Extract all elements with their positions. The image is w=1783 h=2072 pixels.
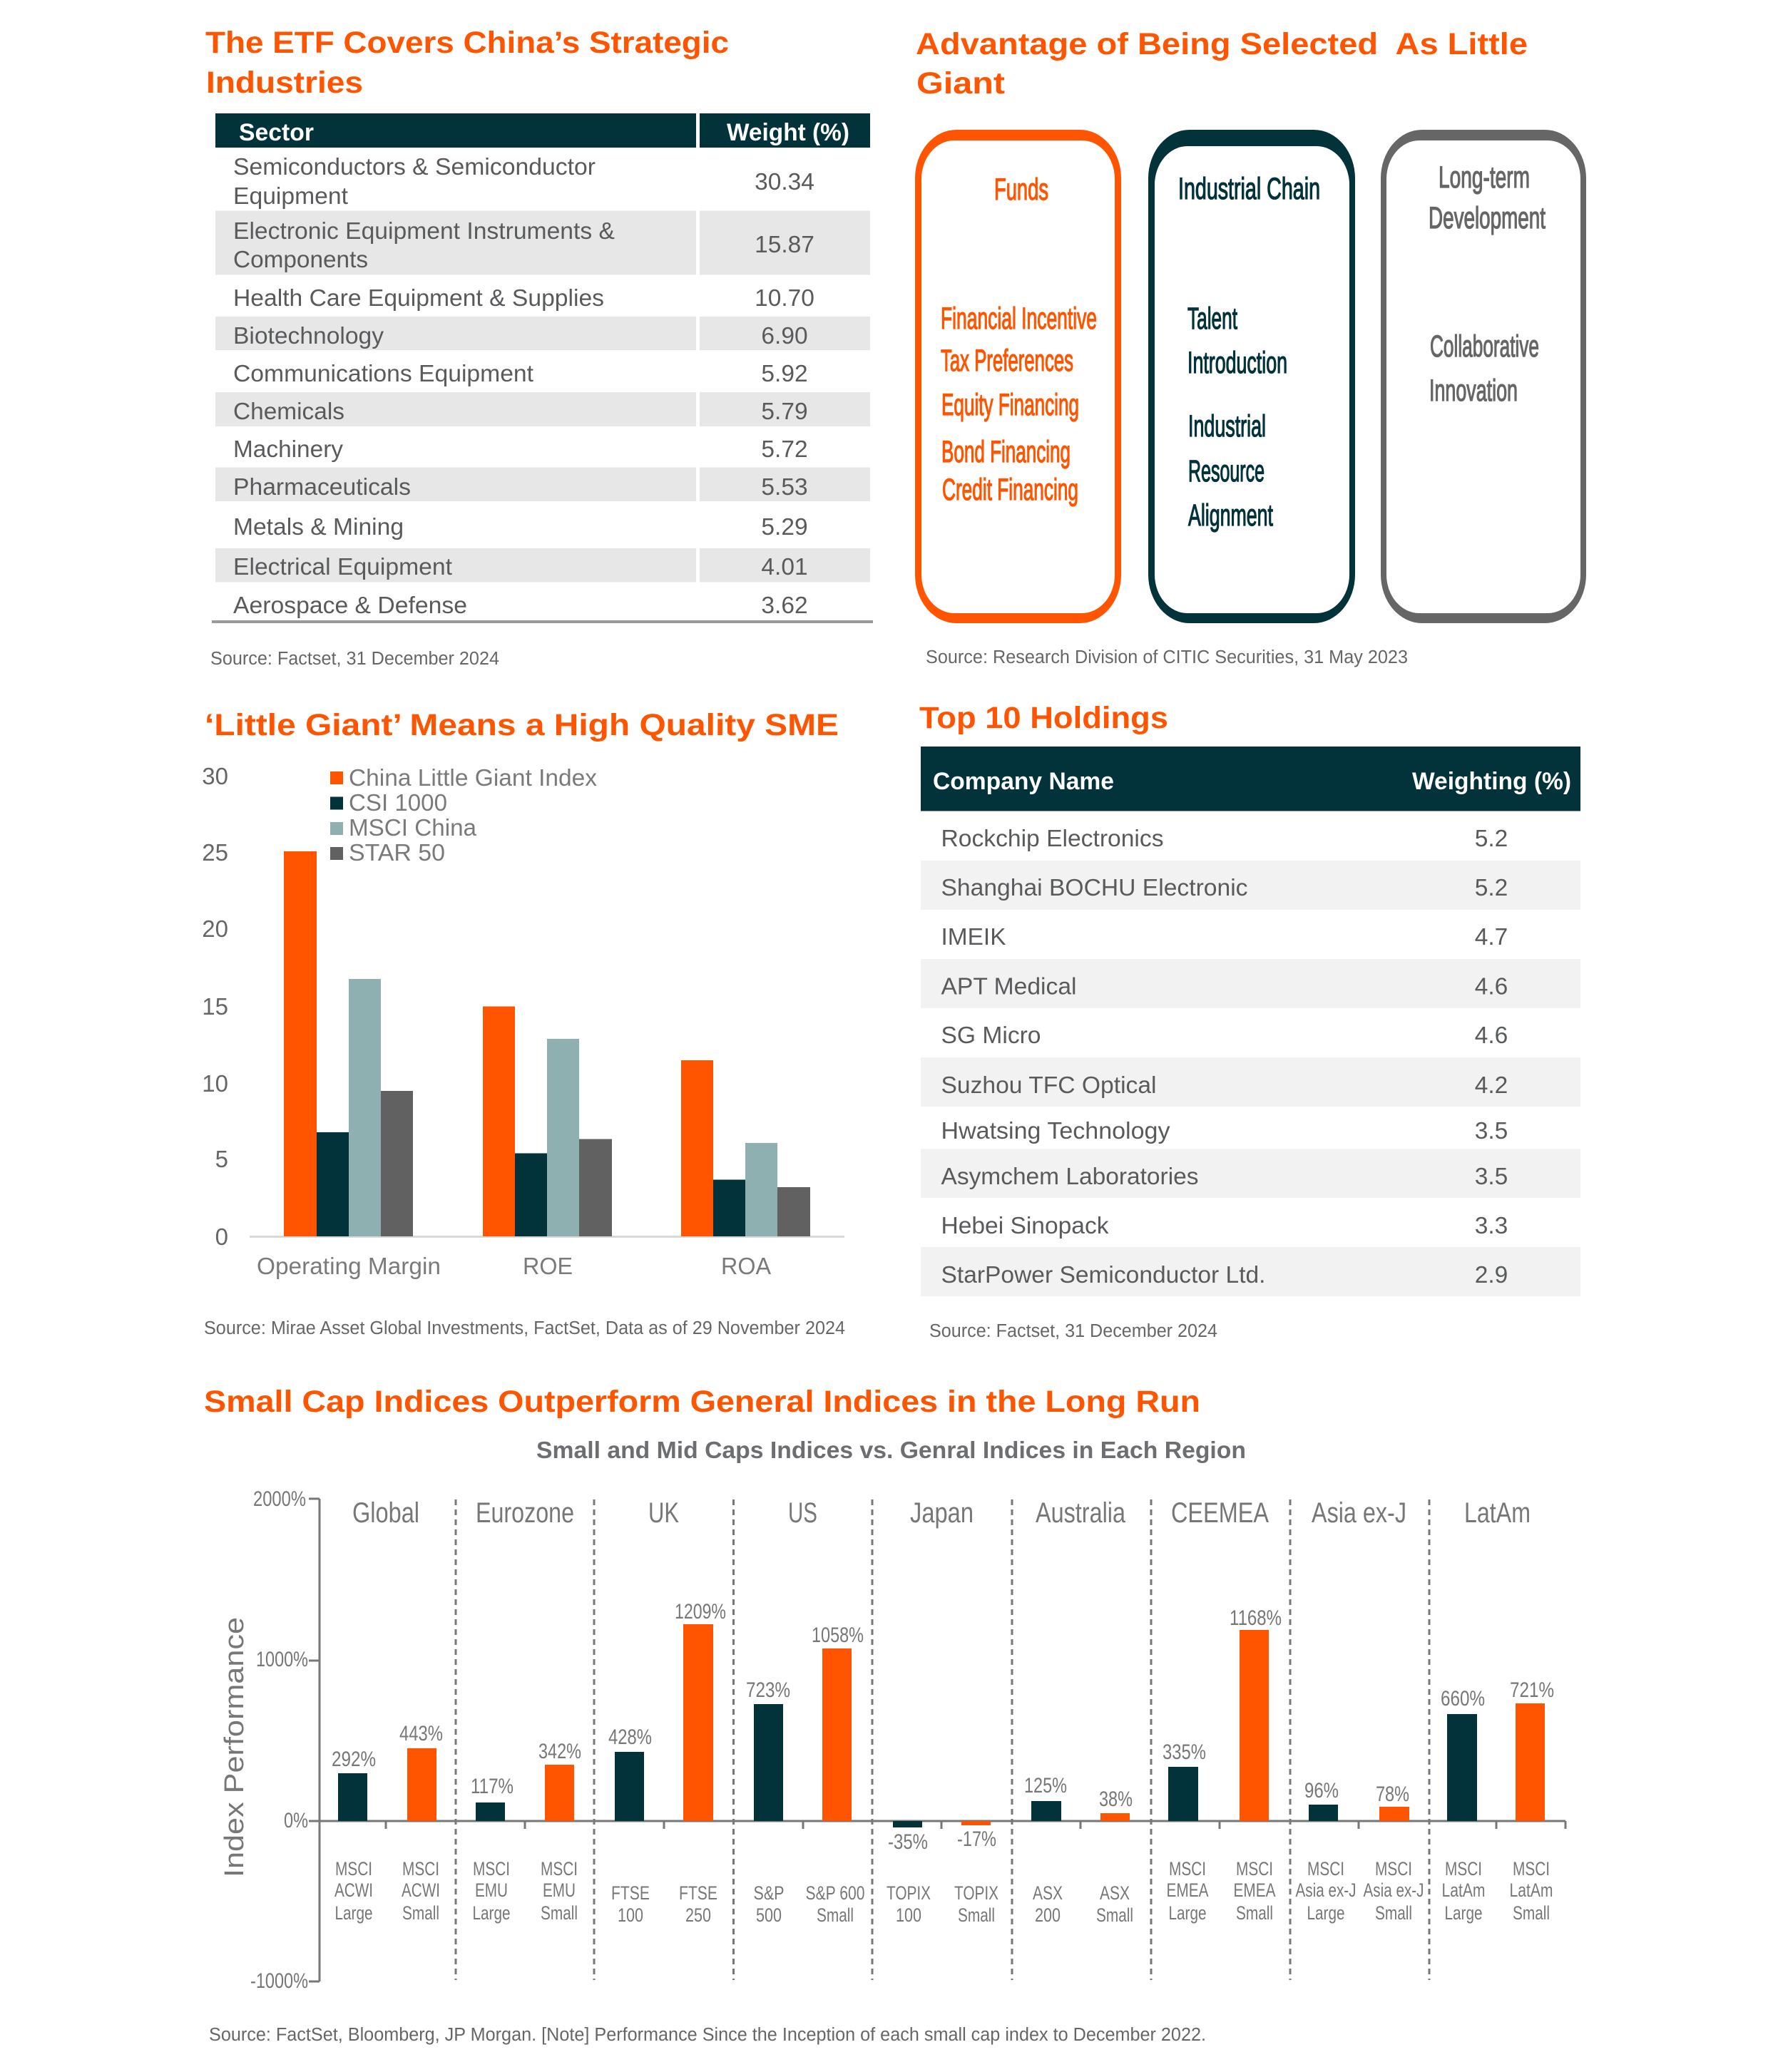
row: hwatsing: Hwatsing Technology (941, 1118, 1170, 1144)
row: metals: Metals & Mining (233, 514, 404, 540)
index name labels: MSCI (335, 1858, 372, 1879)
table header: Sector (239, 119, 314, 146)
value labels: 342% (538, 1740, 581, 1763)
row: aerospace: 3.62 (761, 593, 808, 619)
card: industrial chain: Introduction (1187, 346, 1287, 380)
row: sg micro: 4.6 (1475, 1022, 1508, 1049)
index name labels: ACWI (402, 1879, 440, 1901)
row: electrical (215, 548, 870, 582)
bars: ROA (681, 1060, 810, 1236)
value labels: 125% (1024, 1774, 1067, 1797)
card: long-term development (1381, 130, 1586, 623)
index name labels: TOPIX (887, 1882, 931, 1904)
value labels: 443% (399, 1722, 443, 1745)
index name labels: MSCI (473, 1858, 510, 1879)
row: metals: 5.29 (761, 514, 808, 540)
index name labels: Large (335, 1902, 372, 1924)
card: industrial chain: Alignment (1188, 498, 1273, 533)
category labels: ROA (721, 1253, 771, 1279)
legend: MSCI China (349, 814, 477, 841)
region labels: Australia (1036, 1497, 1126, 1529)
row: shanghai bochu: Shanghai BOCHU Electronic (941, 875, 1248, 901)
index name labels: Large (1168, 1902, 1207, 1924)
y axis labels: -1000% (250, 1969, 308, 1993)
row: electrical: Electrical Equipment (233, 554, 453, 580)
row: semiconductors: Semiconductors & Semiconductor (233, 154, 596, 180)
region labels: Asia ex-J (1312, 1497, 1406, 1529)
bars: ROE (483, 1007, 612, 1236)
heading: advantage (916, 27, 1528, 101)
row: biotechnology: Biotechnology (233, 323, 384, 349)
value labels: 1168% (1230, 1606, 1282, 1630)
row: shanghai bochu: 5.2 (1475, 875, 1508, 901)
card: funds (915, 130, 1121, 623)
region labels: CEEMEA (1171, 1497, 1269, 1529)
index name labels: FTSE (611, 1882, 650, 1904)
index name labels: ASX (1033, 1882, 1063, 1904)
row: biotechnology (215, 317, 870, 350)
panel: advantage of little giant (915, 27, 1586, 667)
row: hwatsing: 3.5 (1475, 1118, 1508, 1144)
card: funds: Bond Financing (941, 435, 1071, 469)
row: rockchip (941, 826, 1508, 852)
index name labels: S&P 600 (806, 1882, 864, 1904)
row: semiconductors (233, 154, 814, 210)
index name labels: MSCI (1169, 1858, 1206, 1879)
card: funds: Funds (994, 173, 1048, 207)
index name labels: ACWI (334, 1879, 373, 1901)
value labels: 38% (1099, 1788, 1133, 1811)
row: asymchem: 3.5 (1475, 1164, 1508, 1190)
table header: Weighting (%) (1412, 768, 1571, 795)
row: biotechnology: 6.90 (761, 323, 808, 349)
index name labels: Large (1307, 1902, 1345, 1924)
index name labels: MSCI (541, 1858, 578, 1879)
row: imeik (941, 924, 1508, 950)
row: electronic equipment (215, 211, 870, 275)
value labels: 660% (1441, 1687, 1485, 1711)
region labels: Japan (910, 1497, 974, 1529)
index name labels: Large (472, 1902, 511, 1924)
index name labels: TOPIX (954, 1882, 998, 1904)
row: apt medical (921, 959, 1580, 1008)
index name labels: Small (958, 1904, 995, 1926)
index name labels: EMEA (1167, 1879, 1208, 1901)
table header (215, 113, 870, 148)
row: suzhou tfc (921, 1057, 1580, 1107)
category labels: ROE (523, 1253, 573, 1279)
region labels: UK (648, 1497, 679, 1529)
row: apt medical: APT Medical (941, 974, 1077, 1000)
value labels: 428% (608, 1725, 652, 1749)
row: imeik: IMEIK (941, 924, 1006, 950)
card: long-term development: Collaborative (1430, 329, 1539, 364)
region labels (352, 1497, 1531, 1529)
heading: small cap outperform: Small Cap Indices Outperform General Indices in the Long Run (204, 1385, 1200, 1419)
legend: STAR 50 (349, 839, 445, 866)
row: hebei sinopack: Hebei Sinopack (941, 1213, 1109, 1239)
index name labels: 100 (618, 1904, 643, 1926)
value labels: 335% (1163, 1740, 1206, 1764)
region labels: Eurozone (476, 1497, 574, 1529)
panel: little giant quality chart (202, 708, 845, 1338)
y axis title: Index Performance (220, 1617, 250, 1877)
heading: strategic industries (205, 26, 729, 100)
row: aerospace: Aerospace & Defense (233, 593, 467, 619)
card: long-term development: Innovation (1429, 374, 1518, 408)
region labels: US (788, 1497, 817, 1529)
index name labels: MSCI (1513, 1858, 1550, 1879)
heading: advantage: Advantage of Being Selected As Little (916, 27, 1528, 61)
row: sg micro: SG Micro (941, 1022, 1041, 1049)
index name labels: 100 (896, 1904, 921, 1926)
index name labels: 500 (756, 1904, 782, 1926)
row: shanghai bochu (921, 861, 1580, 910)
chart subtitle: Small and Mid Caps Indices vs. Genral Indices in Each Region (536, 1437, 1246, 1463)
value labels: 96% (1304, 1779, 1339, 1802)
index name labels: 200 (1035, 1904, 1061, 1926)
row: chemicals: Chemicals (233, 399, 344, 425)
row: asymchem: Asymchem Laboratories (941, 1164, 1198, 1190)
y axis labels: 30 (202, 763, 228, 789)
row: communications: 5.92 (761, 361, 808, 387)
index name labels: MSCI (1445, 1858, 1482, 1879)
source note: Source: Factset, 31 December 2024 (210, 649, 499, 669)
y axis labels: 5 (215, 1146, 228, 1172)
heading: strategic industries: Industries (206, 66, 363, 100)
row: starpower (921, 1247, 1580, 1296)
table header: Company Name (933, 768, 1114, 795)
legend: China Little Giant Index (349, 764, 597, 791)
row: rockchip: Rockchip Electronics (941, 826, 1164, 852)
row: rockchip: 5.2 (1475, 826, 1508, 852)
value labels: 292% (332, 1748, 376, 1771)
y axis labels (250, 1487, 308, 1993)
y axis labels: 2000% (253, 1487, 306, 1511)
index name labels: EMEA (1234, 1879, 1275, 1901)
index name labels: Large (1445, 1902, 1482, 1924)
y axis labels: 1000% (256, 1648, 308, 1671)
category labels (257, 1253, 771, 1279)
y axis labels: 25 (202, 839, 228, 866)
value labels: -35% (888, 1830, 928, 1854)
value labels (332, 1600, 1554, 1854)
y axis labels: 15 (202, 993, 228, 1020)
row: communications: Communications Equipment (233, 361, 534, 387)
index name labels: EMU (475, 1879, 508, 1901)
value labels: 1209% (675, 1600, 726, 1624)
card: industrial chain: Talent (1187, 302, 1237, 336)
index name labels: MSCI (402, 1858, 439, 1879)
row: semiconductors: 30.34 (755, 169, 814, 195)
row: electronic equipment: Components (233, 247, 368, 273)
index name labels: MSCI (1375, 1858, 1412, 1879)
table header (921, 747, 1580, 811)
y axis (309, 1499, 320, 1981)
value labels: 721% (1510, 1678, 1554, 1702)
index name labels: LatAm (1442, 1879, 1485, 1901)
index name labels: 250 (685, 1904, 711, 1926)
legend: CSI 1000 (349, 789, 447, 816)
value labels: -17% (957, 1827, 996, 1851)
region labels: LatAm (1464, 1497, 1531, 1529)
row: apt medical: 4.6 (1475, 974, 1508, 1000)
table header: Weight (%) (727, 119, 849, 146)
source note: Source: FactSet, Bloomberg, JP Morgan. [Note] Performance Since the Inception of each small cap index to December 2022. (209, 2025, 1206, 2045)
bars: large cap indices (338, 1704, 1477, 1827)
index name labels: Small (1375, 1902, 1412, 1924)
heading: top 10 holdings: Top 10 Holdings (919, 701, 1168, 735)
index name labels: MSCI (1307, 1858, 1344, 1879)
row: sg micro (941, 1022, 1508, 1049)
panel: top 10 holdings (919, 701, 1580, 1341)
y axis labels (202, 763, 228, 1250)
region labels: Global (352, 1497, 419, 1529)
card: long-term development: Long-term (1439, 160, 1530, 195)
row: pharmaceuticals (215, 468, 870, 501)
index name labels: ASX (1100, 1882, 1130, 1904)
y axis labels: 10 (202, 1070, 228, 1097)
index name labels: Small (817, 1904, 854, 1926)
row: health care: Health Care Equipment & Supplies (233, 285, 604, 312)
row: health care (233, 285, 814, 312)
row: pharmaceuticals: Pharmaceuticals (233, 474, 411, 501)
heading: strategic industries: The ETF Covers China’s Strategic (205, 26, 729, 60)
row: chemicals (215, 392, 870, 426)
row: pharmaceuticals: 5.53 (761, 474, 808, 501)
y axis labels: 0% (284, 1809, 308, 1832)
row: metals (233, 514, 808, 540)
row: suzhou tfc: 4.2 (1475, 1072, 1508, 1099)
card: industrial chain: Industrial (1188, 409, 1266, 443)
row: electrical: 4.01 (761, 554, 808, 580)
row: machinery: Machinery (233, 436, 343, 463)
index name labels: FTSE (679, 1882, 717, 1904)
index name labels: LatAm (1509, 1879, 1553, 1901)
row: hebei sinopack: 3.3 (1475, 1213, 1508, 1239)
row: chemicals: 5.79 (761, 399, 808, 425)
index name labels: Asia ex-J (1295, 1879, 1357, 1901)
value labels: 1058% (812, 1624, 864, 1647)
index name labels: EMU (543, 1879, 576, 1901)
card: funds: Tax Preferences (941, 344, 1073, 378)
panel: small cap indices (204, 1385, 1565, 2045)
card: funds: Financial Incentive (941, 302, 1097, 336)
row: health care: 10.70 (755, 285, 814, 312)
category labels: Operating Margin (257, 1253, 441, 1279)
row: communications (233, 361, 808, 387)
legend (330, 764, 597, 866)
row: hebei sinopack (941, 1213, 1508, 1239)
row: starpower: 2.9 (1475, 1262, 1508, 1288)
row: suzhou tfc: Suzhou TFC Optical (941, 1072, 1157, 1099)
index name labels: MSCI (1236, 1858, 1273, 1879)
row: machinery (233, 436, 808, 463)
index name labels (334, 1858, 1553, 1926)
row: asymchem (921, 1149, 1580, 1198)
value labels: 78% (1376, 1783, 1409, 1806)
card: industrial chain: Industrial Chain (1178, 172, 1320, 206)
bars: small cap indices (407, 1624, 1545, 1825)
bars: operating margin (284, 851, 413, 1236)
row: imeik: 4.7 (1475, 924, 1508, 950)
y axis labels: 20 (202, 916, 228, 942)
heading: advantage: Giant (916, 66, 1005, 101)
row: aerospace (233, 593, 808, 619)
row: hwatsing (941, 1118, 1508, 1144)
index name labels: Asia ex-J (1364, 1879, 1424, 1901)
panel: sector weights table (205, 26, 873, 669)
source note: Source: Factset, 31 December 2024 (929, 1321, 1217, 1341)
heading: high quality SME: ‘Little Giant’ Means a High Quality SME (205, 708, 839, 742)
row: starpower: StarPower Semiconductor Ltd. (941, 1262, 1265, 1288)
value labels: 723% (746, 1678, 790, 1702)
index name labels: Small (541, 1902, 578, 1924)
index name labels: Small (1096, 1904, 1133, 1926)
card: funds: Credit Financing (942, 473, 1078, 507)
row: semiconductors: Equipment (233, 183, 349, 210)
index name labels: Small (402, 1902, 439, 1924)
source note: Source: Mirae Asset Global Investments, FactSet, Data as of 29 November 2024 (204, 1318, 845, 1338)
row: electronic equipment: Electronic Equipment Instruments & (233, 218, 615, 245)
index name labels: Small (1236, 1902, 1273, 1924)
y axis labels: 0 (215, 1224, 228, 1250)
index name labels: S&P (753, 1882, 785, 1904)
card: funds: Equity Financing (941, 388, 1079, 422)
value labels: 117% (471, 1775, 514, 1798)
row: electronic equipment: 15.87 (755, 232, 814, 258)
row: machinery: 5.72 (761, 436, 808, 463)
card: industrial chain (1148, 130, 1355, 623)
card: industrial chain: Resource (1188, 454, 1265, 488)
card: long-term development: Development (1429, 201, 1546, 235)
index name labels: Small (1513, 1902, 1550, 1924)
source note: Source: Research Division of CITIC Securities, 31 May 2023 (926, 647, 1408, 667)
